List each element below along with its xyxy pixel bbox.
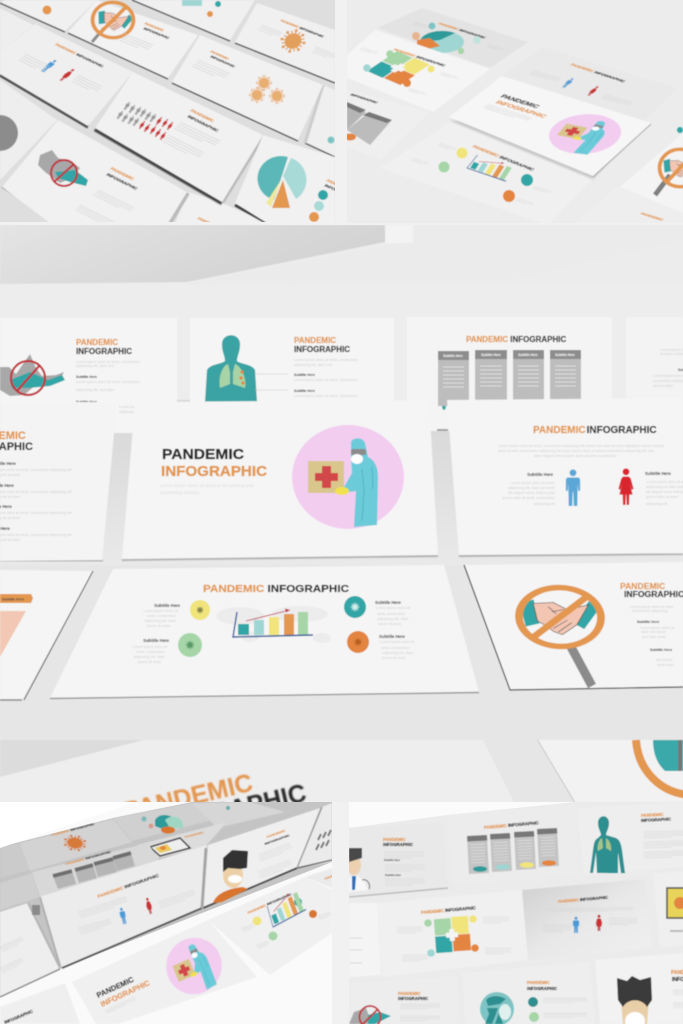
slide: third row left fragment: Subtitle Here	[2, 598, 24, 602]
slide heading: PANDEMICINFOGRAPHIC	[533, 425, 657, 436]
main heading: INFOGRAPHIC	[99, 978, 152, 1009]
slide: head with mask	[595, 953, 683, 1024]
subtitle text	[160, 483, 254, 495]
slide: pie chart	[235, 135, 335, 222]
slide: bar chart infographic: amet, consectetur	[136, 650, 166, 654]
slide heading: PANDEMIC	[294, 336, 336, 345]
slide: pricing table	[448, 805, 580, 885]
slide: bar chart	[438, 144, 535, 202]
panel: isometric slides top left	[0, 0, 356, 229]
main heading: PANDEMIC	[162, 446, 244, 463]
slide: main title slide	[72, 920, 257, 1024]
slide: bar chart infographic: Lorem ipsum dolor sit	[380, 640, 414, 644]
slide: pricing table: Subtitle Here	[481, 353, 501, 357]
slide: puzzle squares	[347, 30, 490, 112]
slide: blue and red figures: ipsum dolor sit amet, consectetur	[502, 496, 556, 500]
slide: handshake prohibited: sed diam amet	[642, 635, 666, 639]
slide heading: PANDEMIC INFOGRAPHIC	[421, 905, 477, 915]
slide: bar chart infographic: adipiscing elit, diam	[377, 617, 408, 621]
slide: lungs: Lorem ipsum dolor sit amet, consectetur	[294, 358, 359, 362]
slide heading: INFOGRAPHIC	[186, 114, 220, 133]
slide: blue and red figures: adipiscing elit	[646, 502, 668, 506]
slide: bar chart infographic: adipiscing elit, diam	[145, 619, 176, 623]
slide: handshake prohibited: diam sed ipsum	[641, 630, 666, 634]
slide heading: INFOGRAPHIC	[142, 27, 170, 40]
slide heading: PANDEMIC	[143, 22, 165, 32]
icon: orange bullet	[347, 631, 369, 653]
slide: virus	[20, 819, 132, 871]
slide: lungs	[190, 318, 394, 404]
slide: blue and red figures	[522, 879, 652, 960]
slide: bar chart infographic: Subtitle Here	[143, 638, 170, 643]
slide: blue and red figures: elit aliquet lorem finibus	[646, 490, 683, 494]
slide: lung circle	[462, 962, 595, 1024]
slide: pricing table: Subtitle Here	[555, 353, 575, 357]
slide: restricted map: Lorem ipsum dolor sit	[119, 405, 153, 409]
main heading: INFOGRAPHIC	[161, 463, 267, 480]
slide: handshake	[624, 132, 683, 208]
slide heading: PANDEMIC INFOGRAPHIC	[279, 19, 325, 38]
slide: restricted map	[2, 120, 187, 228]
slide: restricted map: adipiscing elit, sed diam	[76, 388, 114, 392]
slide: puzzle squares	[377, 890, 528, 977]
slide: bottom left corner	[0, 983, 80, 1024]
enlarged heading: PANDEMIC	[121, 769, 255, 826]
slide heading: PANDEMIC	[189, 108, 216, 123]
slide heading: PANDEMIC INFOGRAPHIC	[484, 820, 540, 830]
slide: bar chart infographic: Subtitle Here	[375, 600, 401, 605]
slide: head with mask	[202, 808, 320, 908]
icon: teal dot	[677, 127, 683, 133]
slide heading: PANDEMIC	[398, 991, 421, 996]
slide: bar chart infographic: Subtitle Here	[379, 634, 405, 639]
panel: frontal slides bottom right	[347, 802, 683, 1024]
icon: green bullet	[178, 633, 202, 657]
slide heading: INFOGRAPHIC	[76, 347, 132, 356]
slide heading: INFOGRAPHIC	[323, 183, 356, 200]
slide heading: PANDEMIC INFOGRAPHIC	[51, 822, 96, 837]
bottom slide heading: PANDEMIC	[196, 216, 221, 229]
slide: blue and red figures: Subtitle Here	[527, 472, 554, 477]
slide: handshake prohibited: amet dolor	[657, 663, 675, 667]
slide: pricing table: Subtitle Here	[443, 354, 463, 358]
icon: medical worker with first aid box	[292, 425, 404, 529]
slide: people pictogram	[95, 72, 263, 202]
icon: teal bullet	[344, 596, 366, 618]
slide heading: PANDEMIC INFOGRAPHIC	[558, 895, 608, 904]
slide: bar chart	[208, 868, 332, 975]
slide heading: PANDEMIC INFOGRAPHIC	[97, 873, 160, 899]
slide: restricted map	[349, 976, 460, 1024]
slide: bar chart infographic: amet, consectetur	[377, 612, 406, 616]
slide: blue and red figures: Subtitle Here	[645, 471, 671, 476]
slide heading: PANDEMIC	[109, 166, 136, 181]
slide: restricted map: Lorem ipsum dolor sit amet, consectetur	[76, 380, 141, 384]
slide: lungs: Subtitle Here	[294, 389, 315, 393]
icon: male figure	[566, 469, 580, 506]
icon: female figure	[618, 468, 634, 505]
slide: puzzle	[113, 803, 212, 841]
slide: handshake prohibited: Subtitle Here	[637, 620, 659, 624]
main heading: PANDEMIC	[95, 975, 136, 1000]
slide: pricing table	[407, 317, 612, 431]
enlarged heading: INFOGRAPHIC	[132, 779, 309, 846]
slide: bar chart infographic: Lorem ipsum dolor sit	[133, 645, 167, 649]
slide: bar chart infographic: amet, consectetur	[147, 614, 177, 618]
slide: blue and red figures	[0, 24, 133, 126]
icon: medical worker	[158, 929, 230, 1003]
slide: blue and red figures: Lorem ipsum dolor sit amet,	[511, 481, 555, 485]
slide: bar chart infographic: ipsum sit amet	[147, 624, 170, 628]
slide heading: INFOGRAPHIC	[624, 589, 683, 599]
slide: pricing table	[32, 843, 160, 897]
slide: blue and red figures	[0, 845, 207, 997]
front row shadow	[0, 554, 683, 561]
slide: doctor	[347, 822, 448, 897]
subtitle text: Lorem ipsum dolor sit amet at the printing and	[160, 483, 254, 488]
slide: lungs: Lorem ipsum dolor sit amet, consectetur	[294, 394, 359, 398]
slide: white left	[0, 903, 60, 997]
slide: left fragment	[0, 402, 117, 561]
slide: handshake prohibited: Subtitle Here	[650, 648, 672, 652]
slide: three viruses	[172, 35, 323, 140]
panel: isometric slides top right	[344, 0, 683, 225]
enlarged icon fragment	[636, 740, 683, 795]
slide: handshake prohibited	[464, 562, 683, 690]
slide heading: PANDEMIC INFOGRAPHIC	[65, 850, 112, 866]
slide heading: PANDEMIC	[184, 831, 205, 839]
slide heading: INFOGRAPHIC	[383, 842, 413, 847]
slide: blue and red figures	[530, 62, 632, 105]
slide heading: INFOGRAPHIC	[398, 996, 428, 1001]
slide heading: PANDEMIC	[639, 212, 665, 222]
slide: handshake prohibited: sed ipsum	[656, 658, 672, 662]
icon: sign post	[571, 647, 592, 686]
slide: blue and red figures	[447, 398, 683, 555]
slide heading: PANDEMIC	[620, 581, 665, 591]
slide: handshake prohibited: consectetur adipiscing	[632, 609, 668, 613]
slide heading: PANDEMIC INFOGRAPHIC	[471, 145, 536, 172]
slide: tablet	[137, 822, 227, 860]
slide heading: INFOGRAPHIC	[105, 172, 139, 191]
slide heading: PANDEMIC	[76, 338, 118, 347]
chart: rising bars	[233, 608, 313, 637]
icon: prohibition ring	[516, 584, 604, 650]
slide heading: PANDEMIC INFOGRAPHIC	[569, 63, 626, 83]
icon: medical worker	[548, 114, 622, 156]
slide: handshake prohibited: Lorem ipsum dolor sit	[640, 626, 674, 630]
slide heading: PANDEMIC	[527, 980, 550, 985]
slide: restricted map: adipiscing elit, diam sed	[76, 364, 114, 368]
slide: right edge fragment: elit sed diam	[653, 384, 673, 388]
slide: bar chart infographic	[50, 565, 479, 698]
shadow under main slide	[451, 120, 602, 180]
slide: bar chart infographic: ipsum sit amet	[382, 656, 405, 660]
slide: main title slide	[122, 400, 438, 559]
slide: far pictogram	[297, 803, 332, 868]
slide heading: INFOGRAPHIC	[209, 55, 236, 68]
slide: blue and red figures: ipsum dolor sit amet	[646, 495, 678, 499]
slide: puzzle circle	[377, 8, 528, 68]
slide: restricted map: Lorem ipsum dolor sit amet, consectetur	[76, 360, 141, 364]
slide: blank left	[349, 903, 381, 977]
slide: pricing table: Subtitle Here	[518, 353, 538, 357]
slide: blue and red figures: adipiscing elit diam sed	[646, 485, 683, 489]
slide: bar chart infographic: Lorem ipsum dolor sit	[144, 609, 178, 613]
slide heading: PANDEMIC	[641, 812, 664, 818]
slide heading: PANDEMIC	[266, 829, 287, 839]
slide: chart fragment	[42, 0, 221, 17]
slide: handshake	[68, 0, 198, 78]
slide: bar chart infographic: Lorem ipsum dolor sit	[376, 606, 410, 610]
main heading: PANDEMIC	[498, 94, 541, 110]
slide heading: PANDEMIC INFOGRAPHIC	[392, 48, 447, 67]
slide heading: PANDEMIC INFOGRAPHIC	[247, 892, 293, 915]
icon: yellow bullet	[190, 600, 210, 620]
slide: title slide	[449, 76, 651, 176]
slide: restricted map: Subtitle Here	[76, 400, 97, 404]
slide: lower right	[572, 187, 683, 225]
slide heading: PANDEMIC	[209, 50, 230, 61]
slide: lungs: adipiscing elit, diam sed	[294, 363, 332, 367]
slide: pricing table	[347, 93, 392, 145]
slide: bar chart infographic: Subtitle Here	[154, 603, 181, 608]
slide heading: PANDEMIC INFOGRAPHIC	[54, 42, 105, 68]
slide: tablet	[653, 872, 683, 948]
slide heading: INFOGRAPHIC	[294, 345, 350, 354]
icon: grey circle fragment	[0, 115, 18, 151]
panel: frontal slides center	[0, 225, 683, 846]
slide: blue and red figures: diam magna lorem ipsum dolor sit amet consectetur	[534, 454, 617, 458]
slide: blue and red figures: amet at enim consectetur adipiscing elit lorem ipsum dolor sit amet consectetur adipiscing elit, sed	[498, 449, 654, 453]
slide: blue and red figures: adipiscing elit	[533, 502, 555, 506]
slide: lungs: Lorem ipsum dolor sit amet, consectetur	[294, 378, 359, 382]
slide heading: PANDEMIC INFOGRAPHIC	[437, 22, 487, 39]
slide: restricted map: Subtitle Here	[76, 375, 97, 379]
slide heading: PANDEMIC INFOGRAPHIC	[466, 335, 567, 344]
slide: bar chart infographic: ipsum sit amet	[138, 660, 161, 664]
slide: blue and red figures: adipiscing elit, diam sed amet	[508, 486, 555, 490]
slide: restricted map	[0, 318, 177, 433]
slide: third row left fragment	[0, 570, 93, 700]
slide: blue and red figures: elit aliquet lorem, finibus justo	[508, 491, 555, 495]
subtitle text: typesetting industry	[160, 490, 200, 495]
slide heading: PANDEMIC	[325, 178, 350, 191]
slide heading: INFOGRAPHIC	[264, 833, 291, 846]
slide: lungs	[577, 802, 683, 875]
slide: blue and red figures: Lorem ipsum dolor sit amet, consectetur adipiscing elit. Morbi sed diam at enim dignissim mauris lobortis	[498, 444, 664, 448]
lower enlarged slide	[0, 740, 683, 846]
slide heading: PANDEMIC	[383, 837, 406, 842]
main heading: INFOGRAPHIC	[493, 100, 548, 119]
slide: doctor: Subtitle Here	[384, 858, 401, 862]
slide: doctor: Subtitle Here	[385, 873, 402, 877]
slide: lungs: Subtitle Here	[294, 373, 315, 377]
slide heading: PANDEMIC INFOGRAPHIC	[203, 583, 349, 595]
slide heading: PANDEMIC	[324, 870, 344, 881]
slide: bar chart infographic: adipiscing elit, diam	[134, 655, 165, 659]
slide: bar chart infographic: adipiscing elit, diam	[382, 651, 413, 655]
slide: restricted map: adipiscing elit	[119, 410, 141, 414]
slide: bar chart infographic: amet, consectetur	[381, 646, 410, 650]
slide: grey upper right	[192, 802, 285, 828]
slide heading: INFOGRAPHIC	[641, 816, 671, 823]
slide: handshake prohibited: Lorem ipsum dolor sit amet	[630, 605, 673, 609]
slide heading: INFOGRAPHIC	[349, 93, 379, 104]
panel: isometric slides bottom left	[0, 802, 344, 1024]
slide heading: INFOGRAPHIC	[527, 986, 557, 991]
slide: virus	[235, 3, 336, 82]
slide: bar chart infographic: ipsum sit amet	[378, 622, 401, 626]
slide: right edge fragment	[626, 317, 683, 401]
